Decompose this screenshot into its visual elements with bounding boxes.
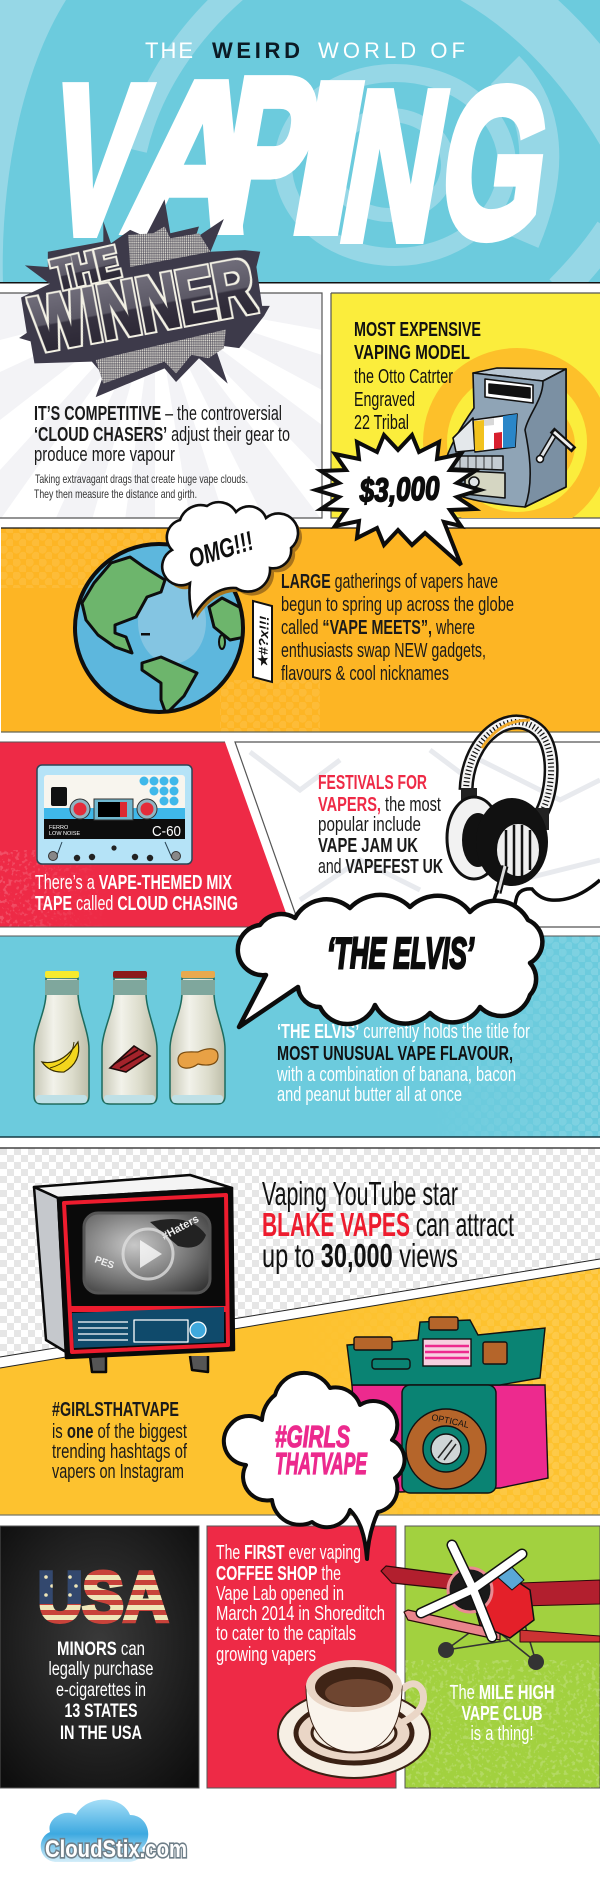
- text: large gatherings: begun to spring up across the globe: [281, 594, 514, 616]
- text: first coffee shop: The FIRST ever vaping: [216, 1542, 361, 1564]
- text: girlsthatvape hashtag: [52, 1399, 187, 1483]
- text: mix tape: TAPE called CLOUD CHASING: [35, 893, 238, 915]
- text: festivals for vapers: VAPE JAM UK: [318, 835, 418, 857]
- text: large gatherings: called “VAPE MEETS”, where: [281, 617, 475, 639]
- rule under hero: [0, 282, 600, 284]
- text: blake vapes: Vaping YouTube star: [262, 1175, 458, 1212]
- callout: girls that vape: [224, 1373, 405, 1559]
- icon: globe: [75, 544, 245, 714]
- text: mix tape: [35, 872, 238, 915]
- text: most expensive: VAPING MODEL: [354, 342, 470, 364]
- panel: hero background: [0, 0, 600, 290]
- text: competitive heading: produce more vapour: [34, 444, 175, 466]
- panel: vape meets: [1, 502, 600, 732]
- text: first coffee shop: Vape Lab opened in: [216, 1583, 344, 1605]
- text: girlsthatvape hashtag: vapers on Instagram: [52, 1461, 184, 1483]
- panel: the elvis flavour: [0, 936, 600, 1137]
- icon: peanut milk bottle: [170, 971, 225, 1104]
- icon: cassette tape: FERRO: [49, 825, 69, 831]
- text: large gatherings: flavours & cool nicknames: [281, 663, 449, 685]
- text: blake vapes: BLAKE VAPES can attract: [262, 1206, 514, 1243]
- text: mile high: VAPE CLUB: [462, 1703, 542, 1725]
- text: mile high: [450, 1682, 554, 1745]
- callout: girls that vape: THATVAPE: [275, 1446, 368, 1481]
- text: competitive heading: [34, 403, 290, 466]
- callout: $3,000 price burst: [316, 435, 480, 565]
- icon: cassette tape: [37, 765, 192, 864]
- title: the weird world of: WEIRD: [212, 38, 300, 63]
- panel: it's competitive: [0, 293, 322, 520]
- text: girlsthatvape hashtag: is one of the biggest: [52, 1421, 187, 1443]
- text: competitive heading: ‘CLOUD CHASERS’ adjust their gear to: [34, 424, 290, 446]
- text: the elvis description: with a combination of banana, bacon: [276, 1064, 516, 1086]
- text: minors: MINORS can: [57, 1639, 145, 1660]
- icon: cassette tape: C-60: [152, 823, 181, 840]
- panel: most expensive model: [331, 293, 600, 524]
- text: most expensive: 22 Tribal: [354, 412, 409, 434]
- badge: the winner: WINNER: [25, 241, 261, 369]
- panel: usa minors: [0, 1526, 199, 1788]
- panel: mix tape: [0, 742, 291, 927]
- text: girlsthatvape hashtag: #GIRLSTHATVAPE: [52, 1399, 179, 1421]
- text: minors: 13 STATES: [64, 1701, 138, 1722]
- icon: tv set: [34, 1175, 234, 1372]
- icon: camera: OPTICAL: [431, 1412, 470, 1430]
- title: vaping: V: [35, 41, 160, 278]
- text: the elvis description: MOST UNUSUAL VAPE FLAVOUR,: [277, 1043, 513, 1065]
- text: blake vapes: [262, 1175, 514, 1274]
- text: festivals for vapers: VAPERS, the most: [318, 794, 441, 816]
- callout: $3,000 price burst: $3,000: [358, 469, 441, 509]
- title: the weird world of: [145, 38, 465, 63]
- panel: girls that vape: [0, 1175, 600, 1863]
- icon: camera: [347, 1317, 548, 1493]
- text: competitive heading: IT’S COMPETITIVE – the controversial: [34, 403, 282, 425]
- text: most expensive: [354, 319, 481, 434]
- title: the weird world of: WORLD OF: [318, 38, 465, 63]
- text: festivals for vapers: FESTIVALS FOR: [318, 772, 427, 794]
- text: the elvis description: ‘THE ELVIS’ currently holds the title for: [277, 1021, 530, 1043]
- text: girlsthatvape hashtag: trending hashtags of: [52, 1441, 187, 1463]
- icon: tv set: #Haters: [160, 1213, 201, 1243]
- title: vaping: P: [204, 35, 333, 271]
- text: large gatherings: [281, 571, 514, 685]
- text: the elvis description: [276, 1021, 530, 1106]
- text: mix tape: There’s a VAPE-THEMED MIX: [35, 872, 232, 894]
- text: first coffee shop: [216, 1542, 385, 1666]
- callout: OMG: [162, 502, 302, 618]
- text: festivals for vapers: and VAPEFEST UK: [318, 856, 443, 878]
- callout: OMG: OMG!!!: [185, 526, 257, 574]
- text: minors: IN THE USA: [60, 1723, 142, 1744]
- title: vaping: A: [112, 39, 281, 276]
- text: competitive detail: Taking extravagant drags that create huge vape clouds.: [35, 472, 248, 486]
- label: censored swear strip: [253, 601, 272, 682]
- text: first coffee shop: growing vapers: [216, 1644, 316, 1666]
- icon: cash register: [444, 368, 574, 507]
- text: large gatherings: LARGE gatherings of vapers have: [281, 571, 498, 593]
- text: mile high: The MILE HIGH: [450, 1682, 554, 1704]
- title: vaping: N: [327, 48, 464, 284]
- logo: cloudstix: CloudStix.com: [45, 1836, 187, 1863]
- text: first coffee shop: to cater to the capitals: [216, 1623, 356, 1645]
- logo: cloudstix: [41, 1800, 187, 1863]
- text: festivals for vapers: [318, 772, 443, 878]
- icon: banana milk bottle: [34, 971, 89, 1104]
- text: competitive detail: [34, 472, 248, 501]
- title: vaping: I: [276, 39, 383, 276]
- title: vaping: [35, 35, 562, 284]
- text: large gatherings: enthusiasts swap NEW gadgets,: [281, 640, 486, 662]
- callout: the elvis: [238, 895, 542, 1027]
- icon: headphones: [447, 720, 551, 893]
- icon: coffee cup: [278, 1660, 430, 1778]
- icon: usa flag lettering: USA: [38, 1558, 168, 1636]
- icon: bacon milk bottle: [102, 971, 157, 1104]
- text: most expensive: the Otto Catrter: [354, 366, 453, 388]
- badge: the winner: [19, 199, 270, 397]
- text: minors: e-cigarettes in: [56, 1680, 146, 1701]
- text: blake vapes: up to 30,000 views: [262, 1237, 458, 1274]
- text: festivals for vapers: popular include: [318, 814, 421, 836]
- title: the weird world of: THE: [145, 38, 193, 63]
- panel: mile high club: [405, 1526, 600, 1788]
- callout: girls that vape: #GIRLS: [275, 1419, 350, 1454]
- cable: headphone lead: [493, 880, 600, 916]
- text: mile high: is a thing!: [470, 1723, 534, 1745]
- text: minors: legally purchase: [48, 1659, 154, 1680]
- text: the elvis description: and peanut butter all at once: [277, 1084, 462, 1106]
- panel: coffee shop: [207, 1526, 396, 1788]
- text: competitive detail: They then measure the distance and girth.: [34, 487, 197, 501]
- text: first coffee shop: COFFEE SHOP the: [216, 1563, 341, 1585]
- text: minors: [48, 1639, 154, 1744]
- badge: the winner: THE: [48, 238, 124, 300]
- panel: youtube star: [0, 1148, 600, 1357]
- icon: cassette tape: LOW NOISE: [49, 831, 81, 837]
- text: most expensive: Engraved: [354, 389, 415, 411]
- icon: tv set: PES: [93, 1254, 116, 1272]
- label: censored swear strip: ★#?x!!!: [255, 615, 272, 668]
- callout: the elvis: ‘THE ELVIS’: [327, 929, 474, 978]
- text: first coffee shop: March 2014 in Shoreditch: [216, 1603, 385, 1625]
- panel: festivals: [235, 720, 600, 927]
- icon: biplane: [381, 1545, 600, 1670]
- text: most expensive: MOST EXPENSIVE: [354, 319, 481, 341]
- title: vaping: G: [430, 44, 562, 281]
